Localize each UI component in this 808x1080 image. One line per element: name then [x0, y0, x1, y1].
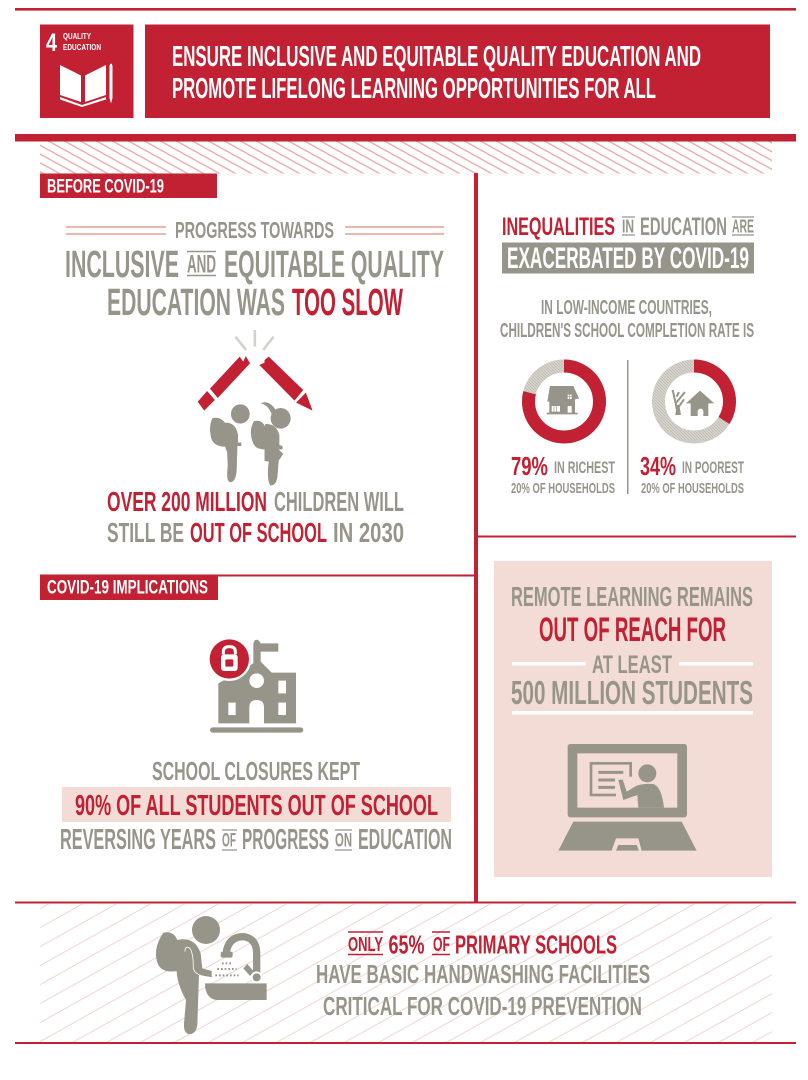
heading: inequalities: IN: [622, 216, 634, 236]
text: handwashing stat: [316, 930, 650, 1021]
icon: broken pencil and children: [198, 330, 313, 485]
donut chart: poorest 34%: [658, 366, 730, 437]
text: handwashing stat: OF: [433, 934, 450, 956]
heading: inequalities: ARE: [732, 216, 754, 236]
text: remote learning: [511, 581, 753, 714]
text: handwashing stat: 65%: [388, 930, 424, 960]
donut chart: richest 79%: [528, 366, 600, 437]
icon: child washing hands: [156, 916, 267, 1034]
icon: hut and tree: [673, 390, 714, 416]
heading: progress: INCLUSIVE: [65, 244, 179, 286]
stat: richest: IN RICHEST: [554, 459, 615, 477]
divider between donuts: [627, 360, 628, 494]
icon: book and pencil: [60, 64, 112, 107]
heading: inequalities: [502, 213, 754, 275]
text: out of school stat: OUT OF SCHOOL: [190, 517, 327, 548]
title banner: [145, 24, 770, 118]
icon: laptop with teacher: [558, 744, 697, 851]
centre vertical divider: [474, 173, 478, 902]
heading: progress: TOO SLOW: [292, 282, 403, 324]
stat: richest: 79%: [511, 451, 548, 481]
panel: covid implications: [40, 575, 452, 856]
text: out of school stat: [107, 486, 404, 548]
stat: richest: 20% OF HOUSEHOLDS: [511, 480, 615, 497]
heading: progress: EQUITABLE QUALITY: [224, 244, 444, 286]
text: school closures: ON: [335, 830, 352, 852]
text: handwashing stat: ONLY: [348, 934, 383, 956]
badge label: [63, 31, 101, 52]
SDG 4 badge: [40, 24, 134, 118]
panel: handwashing: [40, 904, 772, 1042]
text: handwashing stat: CRITICAL FOR COVID-19 PREVENTION: [323, 991, 642, 1021]
heading: progress: AND: [187, 250, 216, 278]
panel: before covid: [40, 174, 444, 548]
text: school closures: PROGRESS: [242, 824, 329, 856]
section label: covid implications: COVID-19 IMPLICATIONS: [47, 576, 208, 598]
icon: closed school: [207, 637, 303, 733]
text: remote learning: AT LEAST: [592, 651, 672, 679]
text: handwashing stat: PRIMARY SCHOOLS: [455, 930, 617, 960]
stat: richest: [511, 451, 615, 497]
text: out of school stat: STILL BE: [107, 517, 184, 548]
section label: before covid: BEFORE COVID-19: [47, 176, 164, 198]
right section rule: [478, 536, 796, 538]
text: out of school stat: IN 2030: [333, 517, 404, 548]
heading: inequalities: EDUCATION: [640, 213, 727, 241]
text: out of school stat: CHILDREN WILL: [274, 486, 404, 517]
heading: progress: [65, 217, 444, 324]
stat: poorest: IN POOREST: [682, 459, 744, 477]
panel: remote learning: [494, 561, 772, 877]
stat: poorest: [640, 451, 744, 497]
heading: progress: PROGRESS TOWARDS: [175, 217, 334, 243]
badge label: EDUCATION: [63, 42, 101, 52]
stat: poorest: 20% OF HOUSEHOLDS: [641, 480, 744, 497]
text: school closures: OF: [222, 830, 236, 852]
text: out of school stat: OVER 200 MILLION: [107, 486, 267, 517]
top rule: [15, 8, 796, 11]
text: school closures: REVERSING YEARS: [60, 824, 216, 856]
text: school closures: [60, 756, 452, 856]
stat: poorest: 34%: [640, 451, 676, 481]
text: school closures: EDUCATION: [358, 824, 452, 856]
bottom rules: [15, 902, 796, 1043]
heading: progress: EDUCATION WAS: [107, 282, 285, 324]
hatched band: [40, 142, 772, 174]
heading: inequalities: INEQUALITIES: [502, 213, 615, 241]
text: school closures: 90% OF ALL STUDENTS OUT OF SCHOOL: [75, 790, 438, 822]
text: completion rate intro: [500, 296, 754, 342]
panel: inequalities: [500, 213, 754, 497]
badge number: 4: [46, 29, 57, 57]
icon: house: [547, 386, 579, 414]
section label: covid implications: [40, 575, 218, 600]
left section rule: [40, 574, 474, 576]
badge label: QUALITY: [63, 31, 91, 41]
header rule: [15, 134, 796, 142]
text: school closures: SCHOOL CLOSURES KEPT: [152, 756, 360, 786]
